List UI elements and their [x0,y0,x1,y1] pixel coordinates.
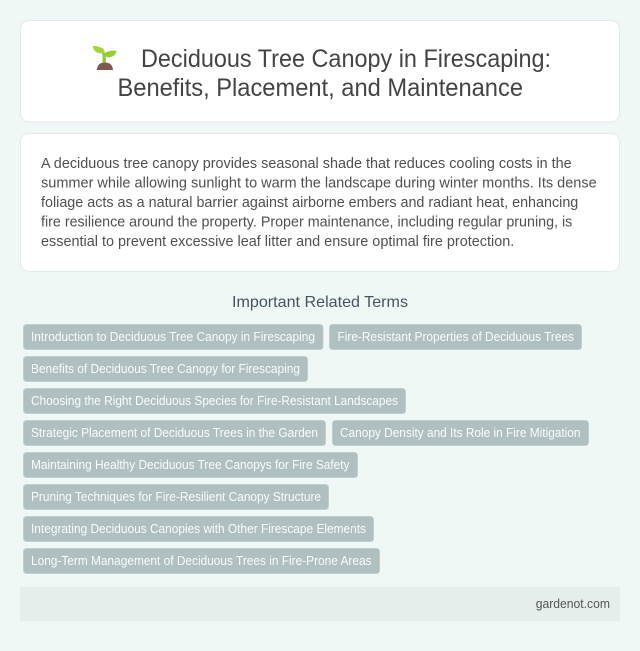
tag: maintaining canopies: Maintaining Healthy Deciduous Tree Canopys for Fire Safety [31,458,350,472]
tag: introduction [24,324,323,350]
tag: choosing species: Choosing the Right Deciduous Species for Fire-Resistant Landscapes [31,394,398,408]
tag: canopy density: Canopy Density and Its Role in Fire Mitigation [340,426,581,440]
tag: benefits: Benefits of Deciduous Tree Canopy for Firescaping [31,362,300,376]
footer [20,587,620,621]
title: Deciduous Tree Canopy in Firescaping: [141,45,551,73]
heading: related terms: Important Related Terms [232,294,408,311]
tag: strategic placement: Strategic Placement of Deciduous Trees in the Garden [31,426,318,440]
tag: long-term management: Long-Term Management of Deciduous Trees in Fire-Prone Areas [31,554,372,568]
tag: pruning techniques [24,484,328,510]
title: Benefits, Placement, and Maintenance [118,74,523,102]
tag: choosing species [24,388,406,414]
icon: seedling [93,46,117,70]
description text: summer while allowing sunlight to warm the landscape during winter months. Its dense [41,174,597,192]
description text: fire resilience around the property. Proper maintenance, including regular pruning, is [41,214,572,230]
description text [41,155,597,250]
tag: integrating canopies: Integrating Deciduous Canopies with Other Firescape Elements [31,522,366,536]
description text: essential to prevent excessive leaf litter and ensure optimal fire protection. [41,233,514,250]
tag: integrating canopies [24,516,374,542]
tag: maintaining canopies [24,452,358,478]
tag: long-term management [24,548,380,574]
related terms tags [24,324,588,574]
tag: introduction: Introduction to Deciduous Tree Canopy in Firescaping [31,330,315,344]
title [118,45,551,102]
description text: foliage acts as a natural barrier against airborne embers and radiant heat, enhancing [41,194,578,211]
tag: strategic placement [24,420,326,446]
tag: fire-resistant properties: Fire-Resistant Properties of Deciduous Trees [338,330,574,344]
panel: title card [20,20,620,122]
tag: pruning techniques: Pruning Techniques for Fire-Resilient Canopy Structure [31,490,321,504]
tag: benefits [24,356,308,382]
tag: canopy density [332,420,588,446]
description text: A deciduous tree canopy provides seasonal shade that reduces cooling costs in the [41,155,572,172]
tag: fire-resistant properties [330,324,582,350]
footer source text: gardenot.com [536,596,610,611]
panel: description [20,134,620,272]
